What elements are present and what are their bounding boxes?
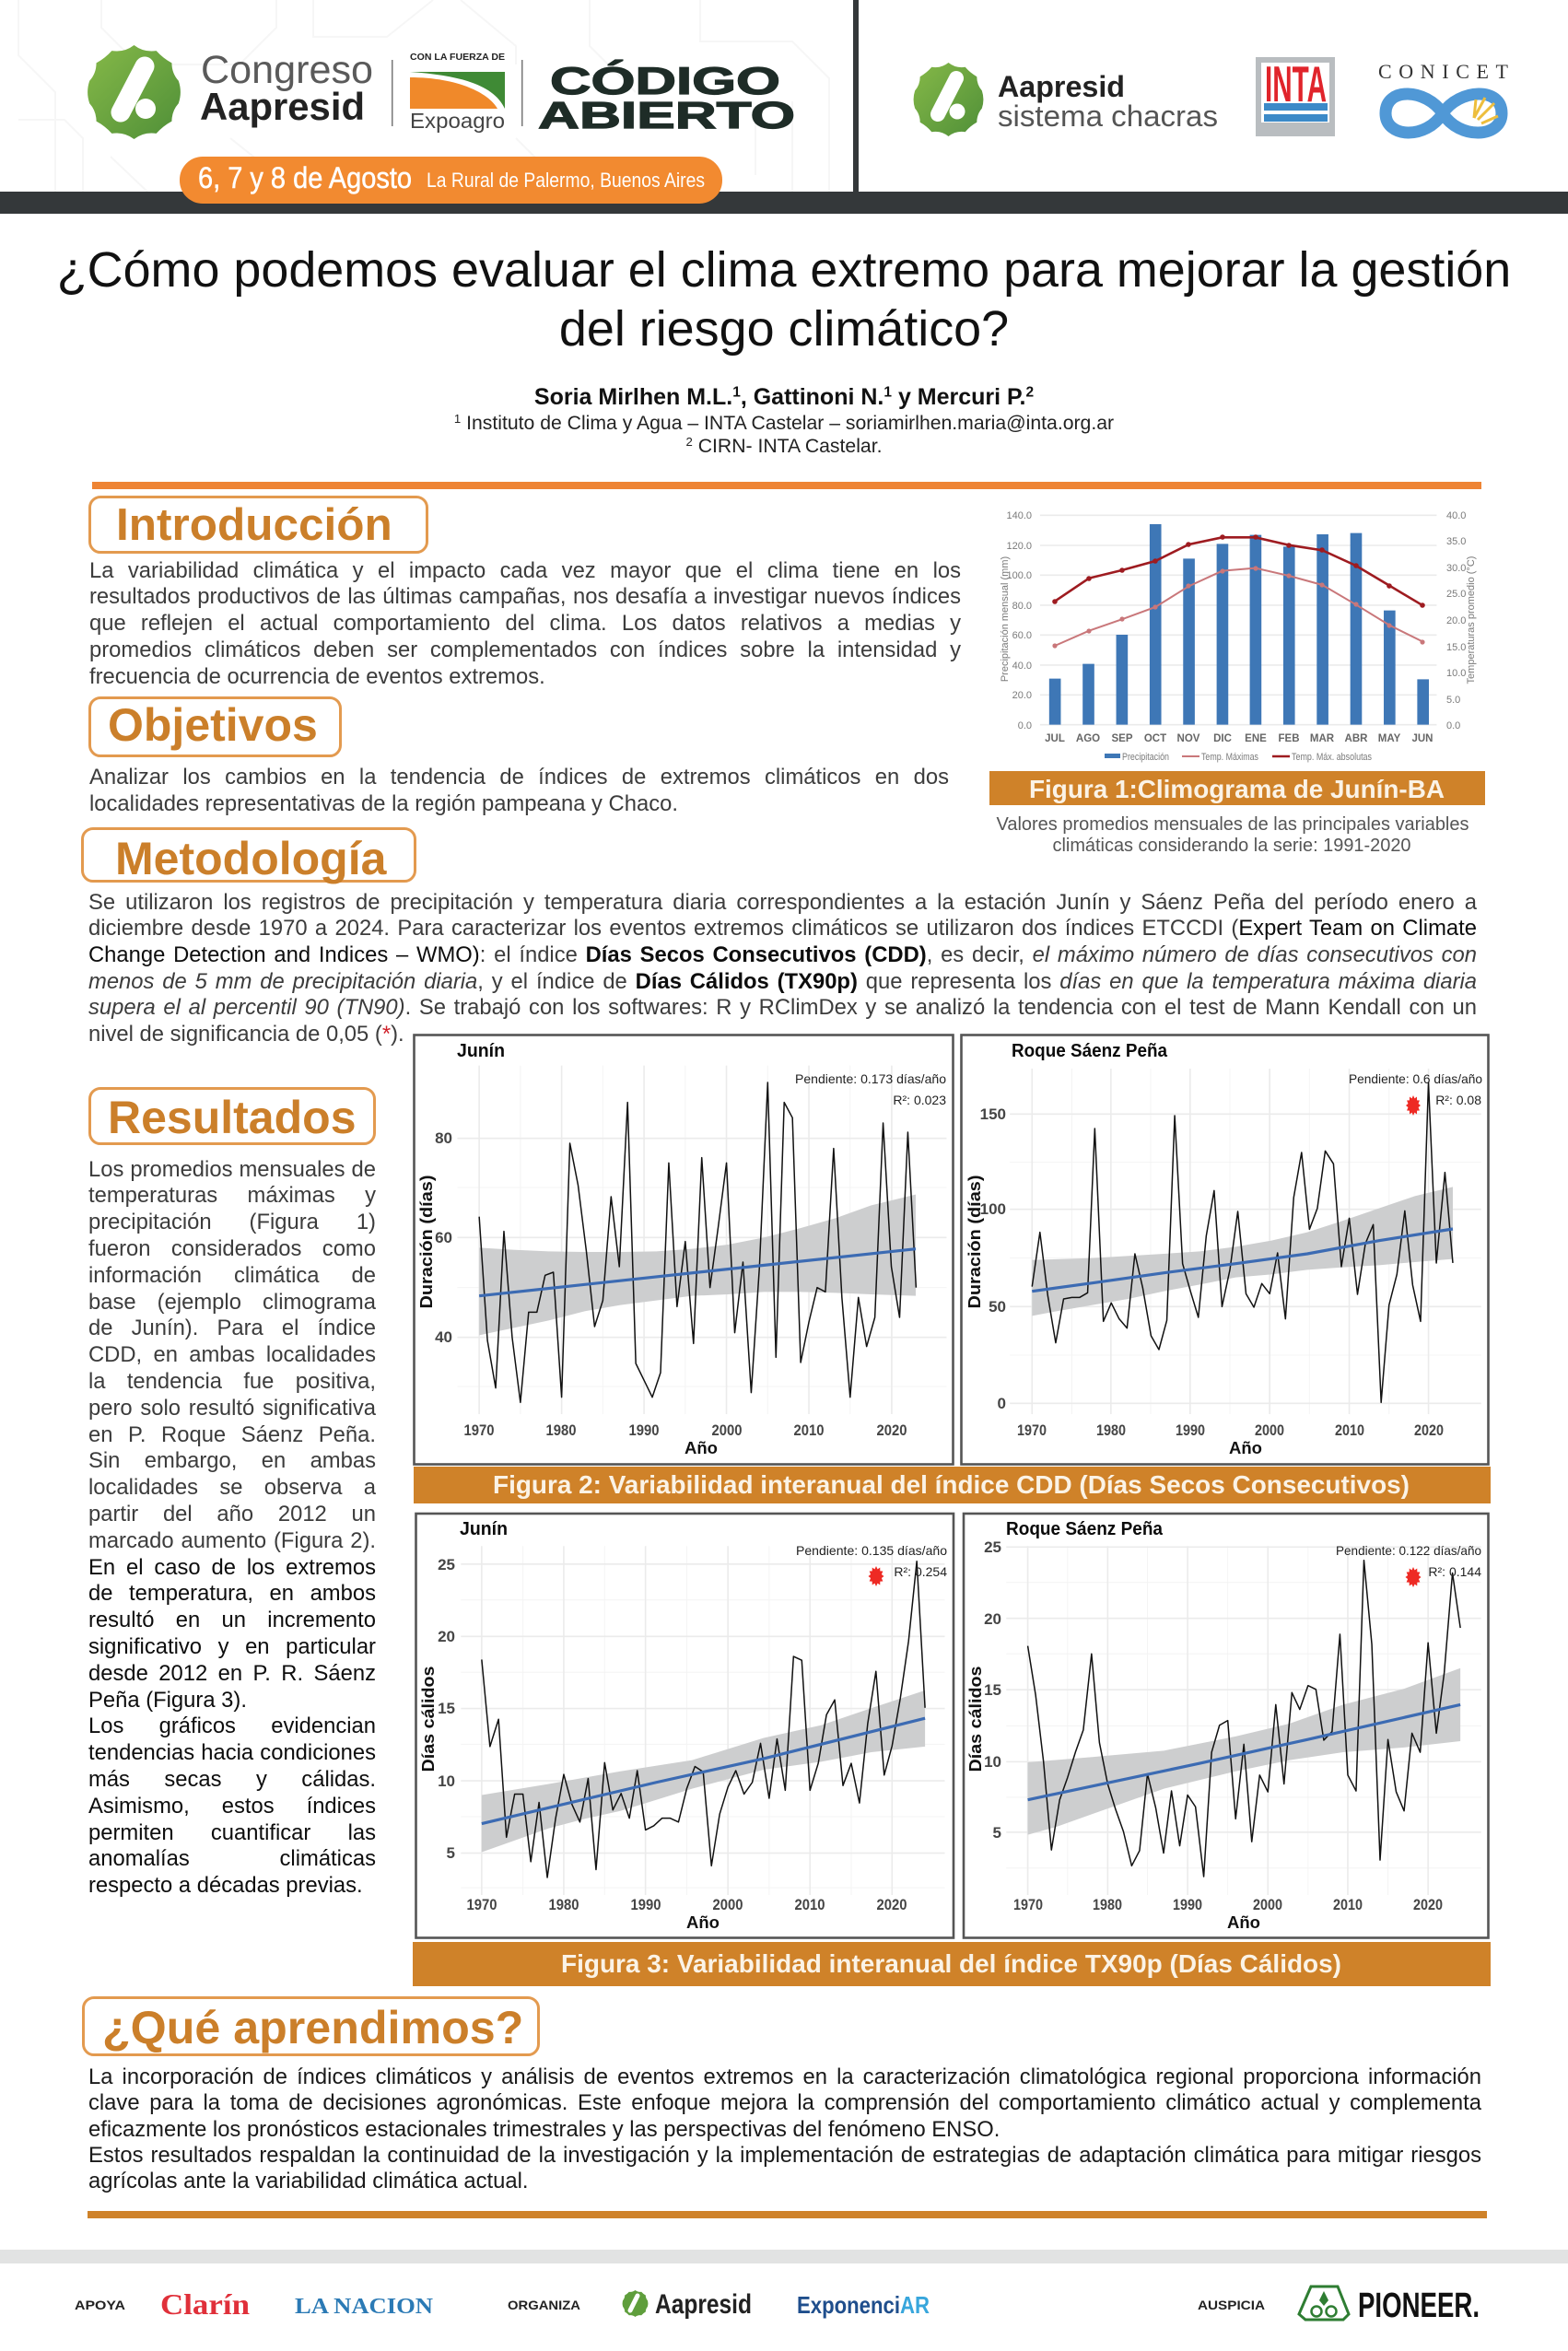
- logo: Congreso Aapresid: Congreso: [201, 48, 373, 92]
- heading: Qué aprendimos: ¿Qué aprendimos?: [102, 2002, 523, 2053]
- sponsors: auspicia: PIONEER.: [1358, 2287, 1480, 2325]
- chart: TX90p Roque Sáenz Peña: 2000: [1253, 1896, 1282, 1913]
- footer grey band: [0, 2250, 1568, 2263]
- chart: TX90p Junín: Pendiente: 0.135 días/año: [796, 1543, 947, 1558]
- icon: significance star: [868, 1566, 884, 1586]
- text: introducción: frecuencia de ocurrencia de eventos extremos.: [89, 664, 545, 689]
- chart: climograma Junín: JUN: [1411, 733, 1433, 744]
- sponsors: apoya: Clarín: [160, 2287, 250, 2321]
- logo: Expoagro: [410, 52, 523, 133]
- text: qué aprendimos: agrícolas ante la variabilidad climática actual.: [88, 2169, 529, 2193]
- text: resultados: permiten cuantificar las: [88, 1820, 376, 1845]
- date pill: [180, 157, 722, 204]
- chart: TX90p Roque Sáenz Peña: Días cálidos: [965, 1667, 985, 1772]
- text: metodología: diciembre desde 1970 a 2024. Para caracterizar los eventos extremos climáticos se utilizaron dos índices ETCCDI (Expert Team on Climate: [88, 916, 1477, 941]
- logo: CONICET: [1378, 60, 1509, 133]
- chart: TX90p Roque Sáenz Peña: 2020: [1413, 1896, 1443, 1913]
- chart: climograma Junín: [1000, 510, 1477, 763]
- sponsors: organiza: Aapresid: [655, 2289, 752, 2320]
- logo: Aapresid sistema chacras: [914, 63, 1218, 136]
- text: resultados: la tendencia fue positiva,: [88, 1369, 376, 1394]
- chart: CDD Junín: 60: [435, 1229, 452, 1246]
- chart: TX90p Junín: 20: [438, 1628, 455, 1645]
- text: resultados: base (ejemplo climograma: [88, 1290, 376, 1315]
- chart: TX90p Roque Sáenz Peña: 10: [984, 1753, 1001, 1771]
- chart: climograma Junín: 140.0: [1006, 510, 1032, 521]
- text: metodología: menos de 5 mm de precipitación diaria, y el índice de Días Cálidos (TX90p) que representa los días en que la temperatura máxima diaria: [88, 969, 1477, 994]
- chart: climograma Junín: Temperaturas promedio (°C): [1466, 556, 1477, 684]
- chart: climograma Junín: 60.0: [1012, 630, 1032, 641]
- header: circuit background panel: [0, 0, 853, 192]
- text: resultados: significativo y en particular: [88, 1634, 376, 1659]
- sponsors: apoya: LA NACION: [295, 2295, 434, 2319]
- chart: TX90p Junín: 2010: [794, 1896, 825, 1913]
- chart: TX90p Roque Sáenz Peña: [964, 1514, 1489, 1938]
- text: resultados: resultó en un incremento: [88, 1608, 376, 1632]
- chart: climograma Junín: 120.0: [1006, 541, 1032, 552]
- text: resultados: Peña (Figura 3).: [88, 1688, 247, 1713]
- text: qué aprendimos: La incorporación de índices climáticos y análisis de eventos extremos en la caracterización climatológica regional proporciona información: [88, 2064, 1481, 2089]
- logo: INTA: [1256, 55, 1335, 136]
- text: resultados: precipitación (Figura 1): [88, 1210, 376, 1234]
- orange rule under authors: [92, 482, 1481, 489]
- chart: CDD Junín: R²: 0.023: [893, 1093, 946, 1107]
- chart: TX90p Roque Sáenz Peña: Año: [1227, 1912, 1260, 1932]
- text: resultados: marcado aumento (Figura 2).: [88, 1528, 376, 1553]
- text: resultados: Asimismo, estos índices: [88, 1794, 376, 1819]
- logo: INTA: INTA: [1265, 55, 1327, 112]
- text: metodología: Se utilizaron los registros de precipitación y temperatura diaria correspondientes a la estación Junín y Sáenz Peña del período enero a: [88, 890, 1477, 915]
- chart: climograma Junín: 10.0: [1446, 668, 1466, 679]
- chart: climograma Junín: OCT: [1144, 733, 1166, 744]
- chart: CDD Roque Sáenz Peña: [962, 1035, 1489, 1465]
- chart: TX90p Junín: Año: [686, 1912, 720, 1932]
- icon: significance star: [1406, 1095, 1421, 1116]
- text: resultados: más secas y cálidas.: [88, 1767, 376, 1792]
- chart: climograma Junín: ENE: [1245, 733, 1267, 744]
- caption: figura 3: Figura 3: Variabilidad interanual del índice TX90p (Días Cálidos): [561, 1949, 1341, 1978]
- chart: CDD Roque Sáenz Peña: 1980: [1096, 1421, 1126, 1439]
- chart: climograma Junín: 0.0: [1446, 720, 1460, 731]
- sponsors: auspicia: AUSPICIA: [1198, 2298, 1265, 2312]
- chart: climograma Junín: 5.0: [1446, 695, 1460, 706]
- text: resultados: En el caso de los extremos: [88, 1555, 376, 1580]
- chart: TX90p Junín: [416, 1514, 954, 1938]
- chart: climograma Junín: 40.0: [1012, 661, 1032, 672]
- text: resultados: pero solo resultó significativa: [88, 1396, 376, 1421]
- sponsors: organiza: [508, 2289, 930, 2320]
- chart: TX90p Roque Sáenz Peña: 1970: [1013, 1896, 1043, 1913]
- affiliations: [454, 412, 1114, 457]
- chart: TX90p Roque Sáenz Peña: R²: 0.144: [1428, 1564, 1481, 1579]
- chart: TX90p Roque Sáenz Peña: 25: [984, 1538, 1001, 1556]
- chart: CDD Junín: Pendiente: 0.173 días/año: [795, 1071, 946, 1086]
- chart: TX90p Junín: 2020: [877, 1896, 907, 1913]
- chart: TX90p Junín: 25: [438, 1556, 455, 1573]
- text: resultados: tendencias hacia condiciones: [88, 1740, 376, 1765]
- text: introducción: La variabilidad climática y el impacto cada vez mayor que el clima tiene en los: [89, 558, 961, 583]
- authors: Soria Mirlhen M.L.1, Gattinoni N.1 y Mercuri P.2: [534, 384, 1034, 410]
- chart: TX90p Roque Sáenz Peña: 2010: [1333, 1896, 1363, 1913]
- logo: Código Abierto: ABIERTO: [538, 94, 795, 136]
- text: resultados: fueron considerados como: [88, 1236, 376, 1261]
- chart: TX90p Roque Sáenz Peña: Pendiente: 0.122 días/año: [1336, 1543, 1481, 1558]
- heading: Resultados: Resultados: [108, 1092, 357, 1143]
- note: figura 1 description: [997, 813, 1469, 856]
- caption: figura 1: Figura 1:Climograma de Junín-BA: [1029, 775, 1445, 803]
- chart: CDD Roque Sáenz Peña: 1990: [1176, 1421, 1205, 1439]
- text: metodología: nivel de significancia de 0,05 (*).: [88, 1022, 404, 1047]
- logo: Aapresid sistema chacras: Aapresid: [998, 70, 1125, 103]
- affiliations: 1 Instituto de Clima y Agua – INTA Castelar – soriamirlhen.maria@inta.org.ar: [454, 412, 1114, 434]
- chart: climograma Junín: Precipitación: [1122, 752, 1169, 763]
- chart: climograma Junín: 20.0: [1012, 690, 1032, 701]
- text: resultados: [88, 1157, 376, 1898]
- text: objetivos: localidades representativas de la región pampeana y Chaco.: [89, 791, 678, 816]
- chart: climograma Junín: Temp. Máx. absolutas: [1292, 752, 1372, 763]
- logo: Congreso Aapresid: Aapresid: [200, 85, 365, 128]
- text: resultados: de temperatura, en ambos: [88, 1581, 376, 1606]
- text: objetivos: [89, 765, 949, 816]
- chart: TX90p Junín: 1990: [630, 1896, 661, 1913]
- chart: CDD Junín: Año: [685, 1438, 718, 1457]
- text: qué aprendimos: eficazmente los pronósticos estacionales trimestrales y las perspectivas del fenómeno ENSO.: [88, 2117, 1000, 2141]
- title: [57, 242, 1511, 357]
- chart: CDD Roque Sáenz Peña: 150: [980, 1105, 1006, 1123]
- chart: CDD Roque Sáenz Peña: 0: [998, 1395, 1006, 1412]
- text: resultados: desde 2012 en P. R. Sáenz: [88, 1661, 376, 1686]
- chart: climograma Junín: 40.0: [1446, 510, 1466, 521]
- chart: CDD Junín: 80: [435, 1129, 452, 1147]
- title: ¿Cómo podemos evaluar el clima extremo para mejorar la gestión: [57, 242, 1511, 298]
- chart: CDD Roque Sáenz Peña: Roque Sáenz Peña: [1012, 1041, 1168, 1061]
- chart: climograma Junín: 30.0: [1446, 563, 1466, 574]
- affiliations: 2 CIRN- INTA Castelar.: [686, 435, 882, 457]
- logo: Congreso Aapresid: [88, 45, 392, 139]
- chart: TX90p Roque Sáenz Peña: 1990: [1173, 1896, 1202, 1913]
- chart: CDD Junín: [415, 1035, 953, 1465]
- chart: climograma Junín: FEB: [1279, 733, 1299, 744]
- text: resultados: respecto a décadas previas.: [88, 1873, 363, 1898]
- chart: climograma Junín: 35.0: [1446, 536, 1466, 547]
- text: metodología: [88, 890, 1477, 1047]
- sponsors: auspicia: [1198, 2287, 1480, 2325]
- caption: figura 2: [414, 1467, 1491, 1503]
- chart: CDD Junín: 1980: [545, 1421, 577, 1439]
- chart: TX90p Junín: 15: [438, 1700, 455, 1717]
- chart: CDD Junín: 40: [435, 1328, 452, 1346]
- chart: climograma Junín: JUL: [1045, 733, 1065, 744]
- chart: CDD Roque Sáenz Peña: R²: 0.08: [1435, 1093, 1481, 1107]
- text: resultados: Los gráficos evidencian: [88, 1714, 376, 1738]
- chart: CDD Roque Sáenz Peña: 2010: [1335, 1421, 1364, 1439]
- chart: climograma Junín: 100.0: [1006, 570, 1032, 581]
- chart: CDD Roque Sáenz Peña: Año: [1229, 1438, 1262, 1457]
- chart: CDD Roque Sáenz Peña: 1970: [1017, 1421, 1047, 1439]
- text: metodología: supera el al percentil 90 (TN90). Se trabajó con los softwares: R y RClimDex y se analizó la tendencia con el test de Mann Kendall con un: [88, 995, 1477, 1020]
- heading: Metodología: Metodología: [115, 833, 386, 884]
- text: introducción: resultados productivos de las últimas campañas, nos desafía a investigar nuevos índices: [89, 584, 961, 609]
- sponsors: organiza: ORGANIZA: [508, 2298, 580, 2312]
- sponsors: apoya: APOYA: [75, 2298, 125, 2312]
- chart: CDD Roque Sáenz Peña: 50: [989, 1298, 1006, 1316]
- text: introducción: [89, 558, 961, 689]
- text: resultados: Los promedios mensuales de: [88, 1157, 376, 1182]
- chart: CDD Roque Sáenz Peña: Duración (días): [965, 1176, 984, 1308]
- text: introducción: que reflejen el actual comportamiento del clima. Los datos relativos a medias y: [89, 611, 961, 636]
- text: resultados: temperaturas máximas y: [88, 1183, 376, 1208]
- text: resultados: anomalías climáticas: [88, 1846, 376, 1871]
- caption: figura 2: Figura 2: Variabilidad interanual del índice CDD (Días Secos Consecutivos): [493, 1470, 1410, 1499]
- logo: Código Abierto: [538, 58, 795, 136]
- text: qué aprendimos: [88, 2064, 1481, 2193]
- chart: TX90p Junín: 1980: [549, 1896, 579, 1913]
- note: figura 1 description: climáticas considerando la serie: 1991-2020: [1052, 835, 1411, 856]
- text: qué aprendimos: clave para la toma de decisiones agronómicas. Este enfoque mejora la comprensión del comportamiento climático actual y complementa: [88, 2090, 1481, 2115]
- text: resultados: partir del año 2012 un: [88, 1502, 376, 1526]
- logo: Expoagro: CON LA FUERZA DE: [410, 52, 505, 63]
- chart: TX90p Junín: R²: 0.254: [894, 1564, 947, 1579]
- chart: TX90p Junín: Junín: [460, 1519, 508, 1539]
- text: resultados: localidades se observa a: [88, 1475, 376, 1500]
- chart: CDD Junín: 2020: [877, 1421, 907, 1439]
- heading: Introducción: Introducción: [116, 499, 392, 550]
- chart: TX90p Roque Sáenz Peña: Roque Sáenz Peña: [1006, 1519, 1164, 1539]
- chart: CDD Junín: 1970: [464, 1421, 494, 1439]
- chart: TX90p Roque Sáenz Peña: 20: [984, 1610, 1001, 1628]
- chart: CDD Junín: 2000: [711, 1421, 743, 1439]
- sponsors: apoya: [75, 2287, 434, 2321]
- chart: climograma Junín: NOV: [1177, 733, 1200, 744]
- text: resultados: en P. Roque Sáenz Peña.: [88, 1422, 376, 1447]
- chart: climograma Junín: MAR: [1310, 733, 1335, 744]
- sponsors: organiza: ExponenciAR: [797, 2291, 930, 2319]
- chart: climograma Junín: ABR: [1345, 733, 1368, 744]
- logo: CONICET: CONICET: [1378, 60, 1509, 83]
- note: figura 1 description: Valores promedios mensuales de las principales variables: [997, 813, 1469, 835]
- chart: TX90p Roque Sáenz Peña: 1980: [1093, 1896, 1122, 1913]
- chart: climograma Junín: 20.0: [1446, 615, 1466, 626]
- header: dark band: [0, 192, 1568, 214]
- text: resultados: CDD, en ambas localidades: [88, 1342, 376, 1367]
- logo: Código Abierto: CÓDIGO: [550, 58, 780, 102]
- title: del riesgo climático?: [559, 301, 1009, 357]
- text: metodología: Change Detection and Indices – WMO): el índice Días Secos Consecutivos (CDD), es decir, el máximo número de días consecutivos con: [88, 942, 1477, 967]
- chart: climograma Junín: MAY: [1378, 733, 1401, 744]
- chart: climograma Junín: Precipitación mensual (mm): [1000, 556, 1011, 682]
- text: resultados: Sin embargo, en ambas: [88, 1448, 376, 1473]
- chart: CDD Roque Sáenz Peña: 2020: [1414, 1421, 1444, 1439]
- bottom orange rule: [88, 2211, 1487, 2218]
- text: objetivos: Analizar los cambios en la tendencia de índices de extremos climáticos en dos: [89, 765, 949, 790]
- text: resultados: de Junín). Para el índice: [88, 1316, 376, 1340]
- chart: TX90p Junín: 2000: [713, 1896, 743, 1913]
- chart: CDD Roque Sáenz Peña: 2000: [1255, 1421, 1284, 1439]
- chart: climograma Junín: SEP: [1111, 733, 1133, 744]
- chart: TX90p Roque Sáenz Peña: 5: [993, 1824, 1001, 1842]
- header: vertical divider: [853, 0, 859, 192]
- chart: climograma Junín: AGO: [1076, 733, 1100, 744]
- chart: TX90p Junín: 10: [438, 1772, 455, 1790]
- logo: Expoagro: Expoagro: [410, 109, 505, 133]
- chart: TX90p Roque Sáenz Peña: 15: [984, 1681, 1001, 1699]
- heading: Objetivos: Objetivos: [108, 699, 318, 751]
- chart: CDD Roque Sáenz Peña: 100: [980, 1200, 1006, 1218]
- chart: climograma Junín: Temp. Máximas: [1201, 752, 1258, 763]
- text: resultados: información climática de: [88, 1263, 376, 1288]
- date pill: 6, 7 y 8 de Agosto: [198, 161, 412, 194]
- chart: CDD Junín: 2010: [794, 1421, 824, 1439]
- chart: climograma Junín: 25.0: [1446, 589, 1466, 600]
- chart: TX90p Junín: 1970: [466, 1896, 497, 1913]
- chart: CDD Junín: Junín: [457, 1041, 505, 1061]
- caption: figura 3: [413, 1942, 1491, 1986]
- chart: climograma Junín: DIC: [1213, 733, 1232, 744]
- chart: CDD Roque Sáenz Peña: Pendiente: 0.6 días/año: [1349, 1071, 1482, 1086]
- chart: TX90p Junín: 5: [447, 1844, 455, 1862]
- chart: TX90p Junín: Días cálidos: [418, 1667, 438, 1772]
- chart: CDD Junín: Duración (días): [416, 1176, 436, 1308]
- logo: Aapresid sistema chacras: sistema chacras: [998, 99, 1218, 133]
- chart: climograma Junín: 15.0: [1446, 642, 1466, 653]
- chart: climograma Junín: 0.0: [1018, 720, 1032, 731]
- icon: significance star: [1406, 1567, 1421, 1587]
- chart: climograma Junín: 80.0: [1012, 601, 1032, 612]
- date pill: La Rural de Palermo, Buenos Aires: [427, 169, 705, 192]
- text: qué aprendimos: Estos resultados respaldan la continuidad de la investigación y la implementación de estrategias de adaptación climática para mitigar riesgos: [88, 2143, 1481, 2168]
- chart: CDD Junín: 1990: [628, 1421, 660, 1439]
- text: introducción: promedios climáticos deben ser complementados con índices sobre la intensidad y: [89, 637, 961, 662]
